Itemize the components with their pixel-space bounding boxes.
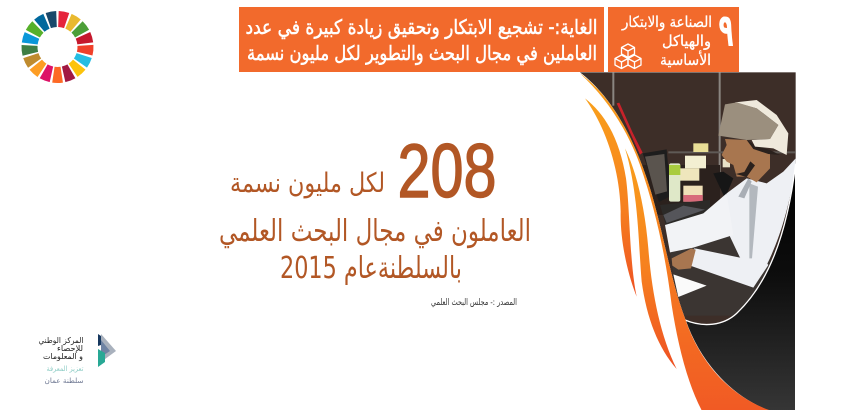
forearm sleeve [688,248,768,288]
main orange swoosh [580,73,770,410]
upper arm [665,193,733,252]
white page cover [567,72,770,410]
text: goal title line 2: والهياكل [662,32,711,50]
text: goal number: ٩ [718,3,734,57]
photo: desk [670,232,777,316]
panel: target banner [239,7,604,72]
logo tagline: تعزيز المعرفة [46,365,84,373]
beard and hair [736,140,780,177]
collar trim [749,183,758,258]
photo panel with swooshes [567,72,796,410]
logo name line 2: للإحصاء [57,344,83,354]
dark corner panel [685,164,796,410]
logo name line 3: و المعلومات [43,352,83,361]
logo mark [98,334,116,367]
torso [727,158,796,265]
text: sultanate and year: بالسلطنةعام 2015 [280,251,462,286]
photo: desk objects [617,103,733,228]
icon: SDG colour wheel [18,7,97,87]
middle orange swoosh [625,148,677,369]
face [722,139,770,182]
photo: wall partitions and shelf [612,72,796,172]
icon: stacked cubes [615,44,641,68]
turban white [735,100,788,155]
logo country: سلطنة عمان [44,377,84,385]
text: researchers caption: العاملون في مجال البحث العلمي [219,214,531,249]
text: goal title line 3: الأساسية [660,50,711,69]
text: source: المصدر :- مجلس البحث العلمي [431,298,517,308]
text: headline number: 208 [398,129,496,214]
photo: paper on desk [673,274,707,297]
photo: office wall [580,72,796,326]
photo: man in white dishdasha [665,100,796,288]
turban pattern [718,102,778,140]
left orange swoosh [585,98,637,297]
text: target statement line 1: الغاية:- تشجيع الابتكار وتحقيق زيادة كبيرة في عدد [246,15,598,40]
hand [672,248,696,270]
text: goal title line 1: الصناعة والابتكار [621,13,712,31]
text: per million population: لكل مليون نسمة [230,168,385,199]
logo name line 1: المركز الوطني [38,336,84,345]
logo: national centre for statistics and information [38,334,116,385]
text: target statement line 2: العاملين في مجال البحث والتطوير لكل مليون نسمة [247,41,597,66]
panel: goal 9 badge [608,3,739,72]
